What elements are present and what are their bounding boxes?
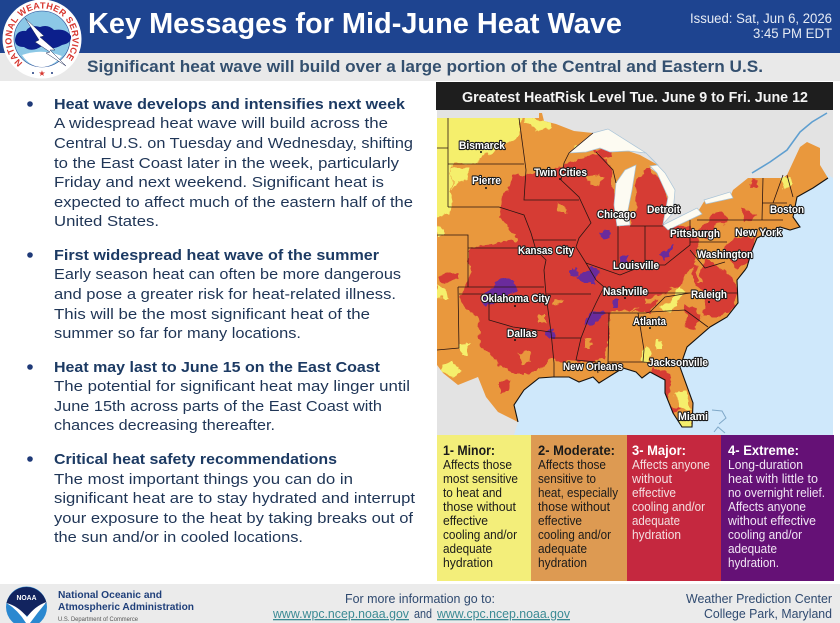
legend: moderate: cooling and/or xyxy=(538,528,611,542)
legend: major: cooling and/or xyxy=(632,500,705,514)
Weather Prediction Center: Weather Prediction Center xyxy=(686,591,833,606)
agency name: Atmospheric Administration xyxy=(58,601,194,613)
heat risk fields xyxy=(430,110,833,435)
legend: minor: most sensitive xyxy=(443,472,518,486)
footer band xyxy=(0,584,840,623)
message 3: chances decreasing thereafter. xyxy=(54,417,275,434)
legend: moderate: those without xyxy=(538,500,611,514)
more information links: For more information go to: xyxy=(345,591,495,606)
message 2: Early season heat can often be more dangerous xyxy=(54,266,401,283)
legend: major: without xyxy=(631,472,673,486)
city labels: Bismarck xyxy=(459,140,506,152)
legend: minor: to heat and xyxy=(443,486,502,500)
city labels: Twin Cities xyxy=(534,167,587,179)
city labels: New York xyxy=(735,227,783,239)
great lakes xyxy=(569,129,733,230)
issued date: Issued: Sat, Jun 6, 2026 xyxy=(690,11,832,26)
city labels: Louisville xyxy=(613,260,659,272)
city labels: Chicago xyxy=(597,209,636,221)
legend: major: Affects anyone xyxy=(632,458,710,472)
city labels: Pittsburgh xyxy=(670,228,720,240)
city labels: Oklahoma City xyxy=(481,293,551,305)
legend: moderate: effective xyxy=(538,514,582,528)
legend: moderate: 2- Moderate: xyxy=(538,443,615,458)
message 4: Critical heat safety recommendations xyxy=(54,451,337,468)
panel: key messages xyxy=(27,96,416,546)
legend: major: effective xyxy=(632,486,676,500)
city labels: Dallas xyxy=(507,328,537,340)
message 2 xyxy=(27,247,401,342)
legend: extreme: Long-duration xyxy=(728,458,803,472)
header banner xyxy=(0,0,840,53)
map title bar xyxy=(436,82,833,110)
icon: NOAA logo: NOAA xyxy=(16,595,36,602)
more information links xyxy=(272,591,570,621)
coastline xyxy=(514,178,828,427)
legend: extreme: adequate xyxy=(728,542,777,556)
message 4 xyxy=(27,451,416,546)
message 4: The most important things you can do in xyxy=(54,471,353,488)
message 1: Friday and next weekend. Significant heat is xyxy=(54,174,384,191)
message 1: A widespread heat wave will build across the xyxy=(54,115,388,132)
agency name: U.S. Department of Commerce xyxy=(58,616,138,623)
more information links: www.cpc.ncep.noaa.gov xyxy=(436,606,570,621)
legend: extreme: Affects anyone xyxy=(728,500,806,514)
message 1: Heat wave develops and intensifies next week xyxy=(54,96,406,113)
city labels: Detroit xyxy=(647,204,680,216)
legend: major: hydration xyxy=(632,528,681,542)
legend: major: adequate xyxy=(632,514,680,528)
icon: National Weather Service logo: ★ xyxy=(38,69,46,78)
message 4: the sun and/or in cooled locations. xyxy=(54,529,303,546)
legend: extreme: cooling and/or xyxy=(728,528,802,542)
orange moderate pockets xyxy=(518,174,710,364)
legend: minor: effective xyxy=(443,514,488,528)
message 3: June 15th across parts of the East Coast with xyxy=(54,398,382,415)
icon: NOAA logo xyxy=(6,586,47,623)
message 4: significant heat are to stay hydrated and interrupt xyxy=(54,490,416,507)
message 1: Central U.S. on Tuesday and Wednesday, shifting xyxy=(54,135,413,152)
message 2: First widespread heat wave of the summer xyxy=(54,247,379,264)
city labels: Atlanta xyxy=(633,316,667,328)
legend: major xyxy=(627,435,721,581)
city labels: New Orleans xyxy=(563,361,623,373)
legend: major: 3- Major: xyxy=(632,443,686,458)
issued date xyxy=(690,11,832,41)
more information links: www.wpc.ncep.noaa.gov xyxy=(272,606,409,621)
message 1: expected to affect much of the eastern half of the xyxy=(54,194,413,211)
map title bar: Greatest HeatRisk Level Tue. June 9 to Fri. June 12 xyxy=(462,90,808,106)
red major risk xyxy=(440,146,758,412)
city labels: Washington xyxy=(697,249,753,261)
legend: moderate: adequate xyxy=(538,542,587,556)
message 2: and pose a greater risk for heat-related illness. xyxy=(54,286,396,303)
legend: extreme: heat with little to xyxy=(728,472,818,486)
legend: extreme: hydration. xyxy=(728,556,779,570)
state borders xyxy=(437,118,793,377)
legend: minor: hydration xyxy=(443,556,493,570)
message 1: United States. xyxy=(54,213,159,230)
message 1 xyxy=(27,96,413,230)
message 3: The potential for significant heat may linger until xyxy=(54,378,410,395)
map: HeatRisk over eastern US xyxy=(430,110,833,435)
message 2: summer so far for many locations. xyxy=(54,325,301,342)
legend: moderate: sensitive to xyxy=(538,472,596,486)
yellow minor risk xyxy=(430,112,790,430)
agency name: National Oceanic and xyxy=(58,589,162,601)
legend: minor: Affects those xyxy=(443,458,512,472)
message 1: to the East Coast later in the week, particularly xyxy=(54,155,400,172)
legend: moderate: hydration xyxy=(538,556,587,570)
subtitle band xyxy=(0,53,840,81)
legend: moderate xyxy=(531,435,627,581)
legend: extreme xyxy=(721,435,834,581)
message 3: Heat may last to June 15 on the East Coast xyxy=(54,359,380,376)
Weather Prediction Center xyxy=(686,591,833,621)
message 3 xyxy=(27,359,410,434)
legend: HeatRisk levels xyxy=(437,435,834,581)
Weather Prediction Center: College Park, Maryland xyxy=(704,606,832,621)
legend: minor: those without xyxy=(443,500,517,514)
message 2: This will be the most significant heat of the xyxy=(54,306,370,323)
purple extreme risk xyxy=(479,231,673,338)
legend: moderate: Affects those xyxy=(538,458,606,472)
icon: National Weather Service logo: NATIONAL WEATHER SERVICE xyxy=(5,2,79,67)
legend: extreme: without effective xyxy=(727,514,816,528)
city labels: Pierre xyxy=(472,175,501,187)
more information links: and xyxy=(414,606,432,621)
city labels: Nashville xyxy=(603,286,648,298)
legend: moderate: heat, especially xyxy=(538,486,619,500)
legend: extreme: no overnight relief. xyxy=(728,486,825,500)
legend: extreme: 4- Extreme: xyxy=(728,443,799,458)
legend: minor: adequate xyxy=(443,542,492,556)
legend: minor xyxy=(437,435,531,581)
title: Key Messages for Mid-June Heat Wave xyxy=(88,8,622,40)
city labels: Miami xyxy=(678,411,708,423)
message 4: your exposure to the heat by taking breaks out of xyxy=(54,510,414,527)
subtitle band: Significant heat wave will build over a large portion of the Central and Eastern U.S. xyxy=(87,57,763,76)
issued date: 3:45 PM EDT xyxy=(753,26,832,41)
city labels: Kansas City xyxy=(518,245,575,257)
legend: minor: 1- Minor: xyxy=(443,443,495,458)
legend: minor: cooling and/or xyxy=(443,528,517,542)
city labels: Raleigh xyxy=(691,289,727,301)
city labels: Boston xyxy=(770,204,804,216)
agency name xyxy=(58,589,194,623)
city labels: Jacksonville xyxy=(648,357,708,369)
city labels xyxy=(459,140,804,423)
